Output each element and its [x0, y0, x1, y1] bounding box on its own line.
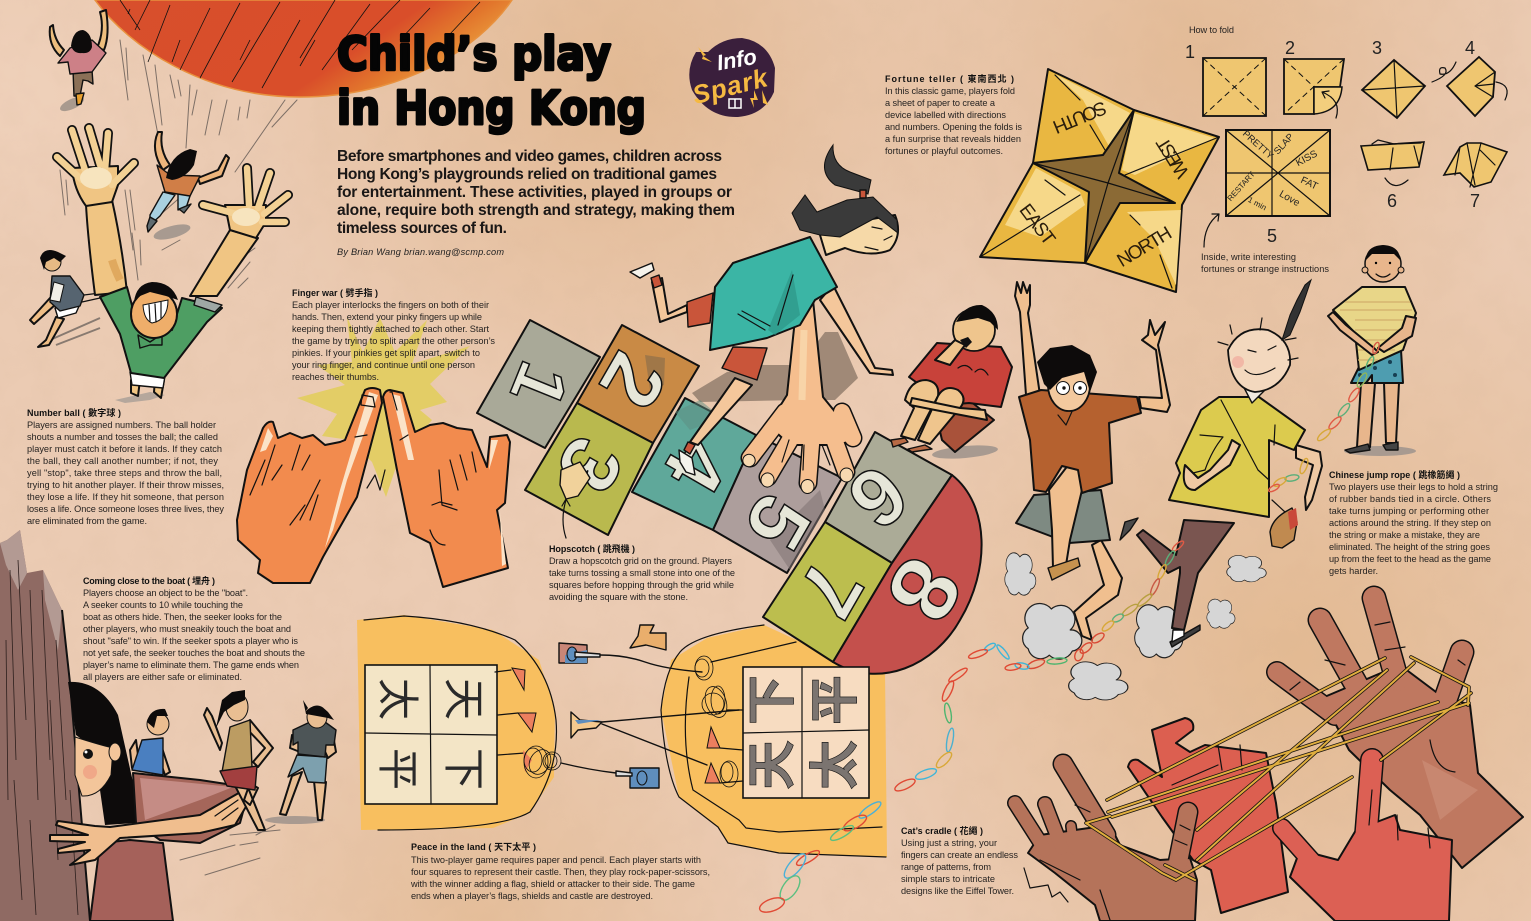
intro paragraph: Hong Kong’s playgrounds relied on traditional games [337, 166, 717, 183]
text: inside note: Inside, write interesting [1201, 252, 1296, 262]
stone [560, 462, 590, 499]
fold step 1 [1185, 42, 1266, 116]
right castle characters: 天 [744, 740, 800, 790]
text: fortune teller: a sheet of paper to create a [885, 98, 996, 108]
text: peace in the land: This two-player game requires paper and pencil. Each player starts with [411, 855, 701, 865]
text: finger war [292, 287, 495, 382]
text: number ball: they lose a life. If they hit someone, that person [27, 492, 224, 502]
text: cat's cradle: fingers can create an endless [901, 850, 1018, 860]
text: cat's cradle: simple stars to intricate [901, 874, 995, 884]
text: hopscotch: avoiding the square with the stone. [549, 592, 688, 602]
hopscotch number 4: 4 [646, 422, 747, 508]
intro paragraph: timeless sources of fun. [337, 220, 507, 237]
text: coming close to the boat: Coming close to the boat ( 埋舟 ) [83, 575, 215, 586]
text: cat's cradle: designs like the Eiffel Tower. [901, 886, 1014, 896]
hopscotch number 6: 6 [831, 447, 924, 546]
text: coming close to the boat: Players choose an object to be the "boat". [83, 588, 248, 598]
right castle characters: 下 [744, 675, 800, 725]
falling ball motion lines [60, 40, 297, 288]
left flags [495, 668, 561, 778]
fold step 5 with fortunes: PRETTY [1240, 129, 1276, 162]
text: peace in the land [410, 841, 710, 901]
text: fortune teller: and numbers. Opening the folds is [885, 122, 1022, 132]
fold step 5 with fortunes [1226, 129, 1330, 246]
text: how to fold: How to fold [1189, 25, 1234, 35]
left castle characters: 天 [440, 678, 487, 720]
text: coming close to the boat: A seeker counts to 10 while touching the [83, 600, 243, 610]
text: cat's cradle: range of patterns, from [901, 862, 991, 872]
text: fortune teller [885, 73, 1022, 156]
text: number ball: player must catch it before it lands. If they catch [27, 444, 222, 454]
text: number ball [27, 407, 224, 526]
text: coming close to the boat [83, 575, 305, 682]
fold step 7: 7 [1470, 191, 1480, 211]
hopscotch number 3: 3 [539, 422, 640, 507]
fortune teller label north: NORTH [1114, 223, 1176, 272]
attackers between castles [559, 625, 739, 788]
fortune teller [980, 69, 1219, 292]
text: chinese jump rope [1329, 469, 1498, 576]
fold step 5 arrow [1204, 214, 1219, 247]
giant forward hand [743, 300, 858, 494]
hopscotch number 2: 2 [582, 338, 683, 423]
fold step 1: 1 [1185, 42, 1195, 62]
fold step 5 with fortunes: KISS [1294, 148, 1320, 169]
text: inside note [1201, 252, 1329, 274]
text: peace in the land: four squares to represent their castle. Then, they play rock-paper-scissors, [411, 867, 710, 877]
fold step 4: 4 [1465, 38, 1475, 58]
fold step 5 with fortunes: RESTART [1226, 170, 1257, 203]
fold step 2 [1284, 38, 1344, 118]
right castle characters: 平 [807, 675, 863, 725]
text: chinese jump rope: gets harder. [1329, 566, 1378, 576]
text: finger war: Each player interlocks the fingers on both of their [292, 300, 489, 310]
text: coming close to the boat: boat as others hide. Then, the seeker looks for the [83, 612, 282, 622]
text: cat's cradle: Using just a string, your [901, 838, 997, 848]
text: chinese jump rope: the string or make a mistake, they are [1329, 530, 1480, 540]
intro paragraph [337, 148, 735, 237]
hopscotch number 1: 1 [494, 351, 584, 418]
text: peace in the land: Peace in the land ( 天下太平 ) [411, 841, 536, 852]
text: finger war: Finger war ( 劈手指 ) [292, 287, 378, 298]
castle right grid [695, 656, 869, 798]
left castle characters: 下 [440, 748, 487, 790]
hopscotch number 5: 5 [727, 479, 828, 564]
text: chinese jump rope: actions around the string. If they step on [1329, 518, 1491, 528]
text: fortune teller: Fortune teller ( 東南西北 ) [885, 73, 1014, 84]
text: cat's cradle [901, 825, 1018, 896]
fortune teller label south: SOUTH [1050, 96, 1109, 137]
red ball [95, 0, 512, 97]
text: number ball: trying to hit another player. If their throw misses, [27, 480, 224, 490]
pinky-war starburst [297, 317, 470, 497]
castle left [357, 615, 561, 830]
hopscotch number 7: 7 [779, 547, 880, 632]
title: in Hong Kong [337, 81, 646, 135]
title: Child’s play [337, 27, 611, 81]
wall [0, 530, 90, 921]
fold step 5 with fortunes: FAT [1299, 175, 1319, 192]
pinky-war hands [237, 388, 510, 587]
text: number ball: loses a life. Once someone loses three lives, they [27, 504, 224, 514]
text: fortune teller: fortunes or playful outcomes. [885, 146, 1003, 156]
text: cat's cradle: Cat’s cradle ( 花繩 ) [901, 825, 983, 836]
text: coming close to the boat: other players, who must sneakily touch the boat and [83, 624, 291, 634]
text: number ball: the ball, they call another number; if not, they [27, 456, 218, 466]
text: chinese jump rope: eliminated. The height of the string goes [1329, 542, 1490, 552]
cat's cradle lower left hand [1015, 764, 1197, 921]
text: peace in the land: ends when a player’s flags, shields and castle are destroyed. [411, 891, 653, 901]
intro paragraph: alone, require both strength and strategy, making them [337, 202, 735, 219]
text: fortune teller: device labelled with directions [885, 110, 1006, 120]
text: coming close to the boat: all players are either safe or eliminated. [83, 672, 242, 682]
text: finger war: hands. Then, extend your pinky fingers up while [292, 312, 482, 322]
text: fortune teller: In this classic game, players fold [885, 86, 1015, 96]
text: coming close to the boat: shout "safe" to win. If the seeker spots a player who is [83, 636, 298, 646]
left castle characters: 太 [374, 678, 421, 720]
fold step 4 [1432, 38, 1507, 116]
badge word spark: Spark [689, 62, 772, 110]
text: number ball: yell "stop", take three steps and throw the ball, [27, 468, 222, 478]
text: number ball: Number ball ( 數字球 ) [27, 407, 121, 418]
intro paragraph: for entertainment. These activities, played in groups or [337, 184, 732, 201]
child in pink shirt [50, 10, 108, 114]
small zigzag [1024, 868, 1068, 902]
child in grey shirt [265, 700, 336, 824]
badge book icon [729, 99, 741, 108]
text: peace in the land: with the winner adding a flag, shield or attacker to their side. The game [410, 879, 695, 889]
text: inside note: fortunes or strange instructions [1201, 264, 1329, 274]
badge bolts [698, 47, 768, 108]
hopscotch shadow [692, 332, 858, 402]
fold step 2: 2 [1285, 38, 1295, 58]
text: number ball: shouts a number and tosses the ball; the called [27, 432, 218, 442]
child in blue tank top [130, 709, 170, 775]
text: hopscotch: take turns tossing a small stone into one of the [549, 568, 735, 578]
left castle characters: 平 [374, 748, 421, 790]
stone arrow [562, 499, 570, 538]
text: hopscotch: squares before hopping through the grid while [549, 580, 734, 590]
text: hopscotch [549, 543, 735, 602]
text: finger war: keeping them tightly attached to each other. Start [292, 324, 489, 334]
text: fortune teller: a fun surprise that reveals hidden [885, 134, 1021, 144]
text: finger war: your ring finger, and continue until one person [292, 360, 475, 370]
text: finger war: pinkies. If your pinkies get split apart, switch to [292, 348, 480, 358]
running child [30, 250, 100, 347]
text: finger war: reaches their thumbs. [292, 372, 379, 382]
fold step 7 [1444, 143, 1507, 211]
big-hands child in green shirt [57, 128, 288, 403]
badge word info: Info [715, 44, 759, 75]
Info Spark badge [689, 38, 775, 117]
sitting boy in red shirt [891, 305, 1012, 461]
cat's cradle string [1086, 657, 1471, 880]
boy with glasses [1015, 282, 1170, 640]
text: coming close to the boat: not yet safe, the seeker touches the boat and shouts the [83, 648, 305, 658]
title [337, 27, 646, 135]
right castle characters [744, 675, 863, 790]
cat's cradle upper right hand [1277, 598, 1523, 868]
right castle characters: 太 [807, 740, 863, 790]
cat's cradle red lower right hand [1282, 760, 1452, 921]
hopscotch grid [477, 320, 983, 674]
fold step 5 with fortunes: 5 [1267, 226, 1277, 246]
cat's cradle red centre hand [1128, 718, 1288, 913]
dust clouds [1005, 553, 1266, 700]
text: finger war: the game by trying to split apart the other person’s [292, 336, 495, 346]
fold step 5 with fortunes: 1 min [1246, 195, 1268, 212]
text: chinese jump rope: Two players use their legs to hold a string [1329, 482, 1498, 492]
hopscotch girl [630, 145, 898, 494]
fortune teller label west: WEST [1153, 133, 1194, 181]
text: chinese jump rope: up from the feet to the head as the game [1329, 554, 1491, 564]
hopscotch number 8: 8 [866, 541, 983, 639]
text: coming close to the boat: player’s name to eliminate them. The game ends when [83, 660, 299, 670]
fold step 3 [1362, 38, 1425, 118]
fold step 5 with fortunes: SLAP [1272, 132, 1296, 157]
text: chinese jump rope: of rubber bands tied in a circle. Others [1329, 494, 1491, 504]
fold step 6 [1361, 140, 1424, 211]
castle right base [661, 625, 887, 857]
child in tan top [204, 690, 280, 835]
text: chinese jump rope: Chinese jump rope ( 跳橡筋繩 ) [1329, 469, 1460, 480]
text: hopscotch: Hopscotch ( 跳飛機 ) [549, 543, 635, 554]
fold step 5 with fortunes: Love [1277, 189, 1302, 209]
child in orange shirt [147, 132, 229, 243]
text: chinese jump rope: take turns jumping or performing other [1329, 506, 1489, 516]
text: number ball: Players are assigned numbers. The ball holder [27, 420, 216, 430]
intro paragraph: Before smartphones and video games, children across [337, 148, 722, 165]
right flags and scribbles [695, 656, 743, 787]
left castle characters [374, 678, 487, 790]
text: hopscotch: Draw a hopscotch grid on the ground. Players [549, 556, 732, 566]
girl in yellow shirt [1120, 280, 1322, 647]
rubber band chain [758, 342, 1380, 915]
fold step 6: 6 [1387, 191, 1397, 211]
byline: By Brian Wang brian.wang@scmp.com [337, 247, 504, 257]
fold diagrams [1185, 38, 1507, 247]
boy in striped shirt [1328, 245, 1416, 456]
fold step 3: 3 [1372, 38, 1382, 58]
seeker girl at wall [50, 682, 260, 921]
fortune teller label east: EAST [1015, 200, 1059, 250]
text: number ball: are eliminated from the game. [27, 516, 147, 526]
